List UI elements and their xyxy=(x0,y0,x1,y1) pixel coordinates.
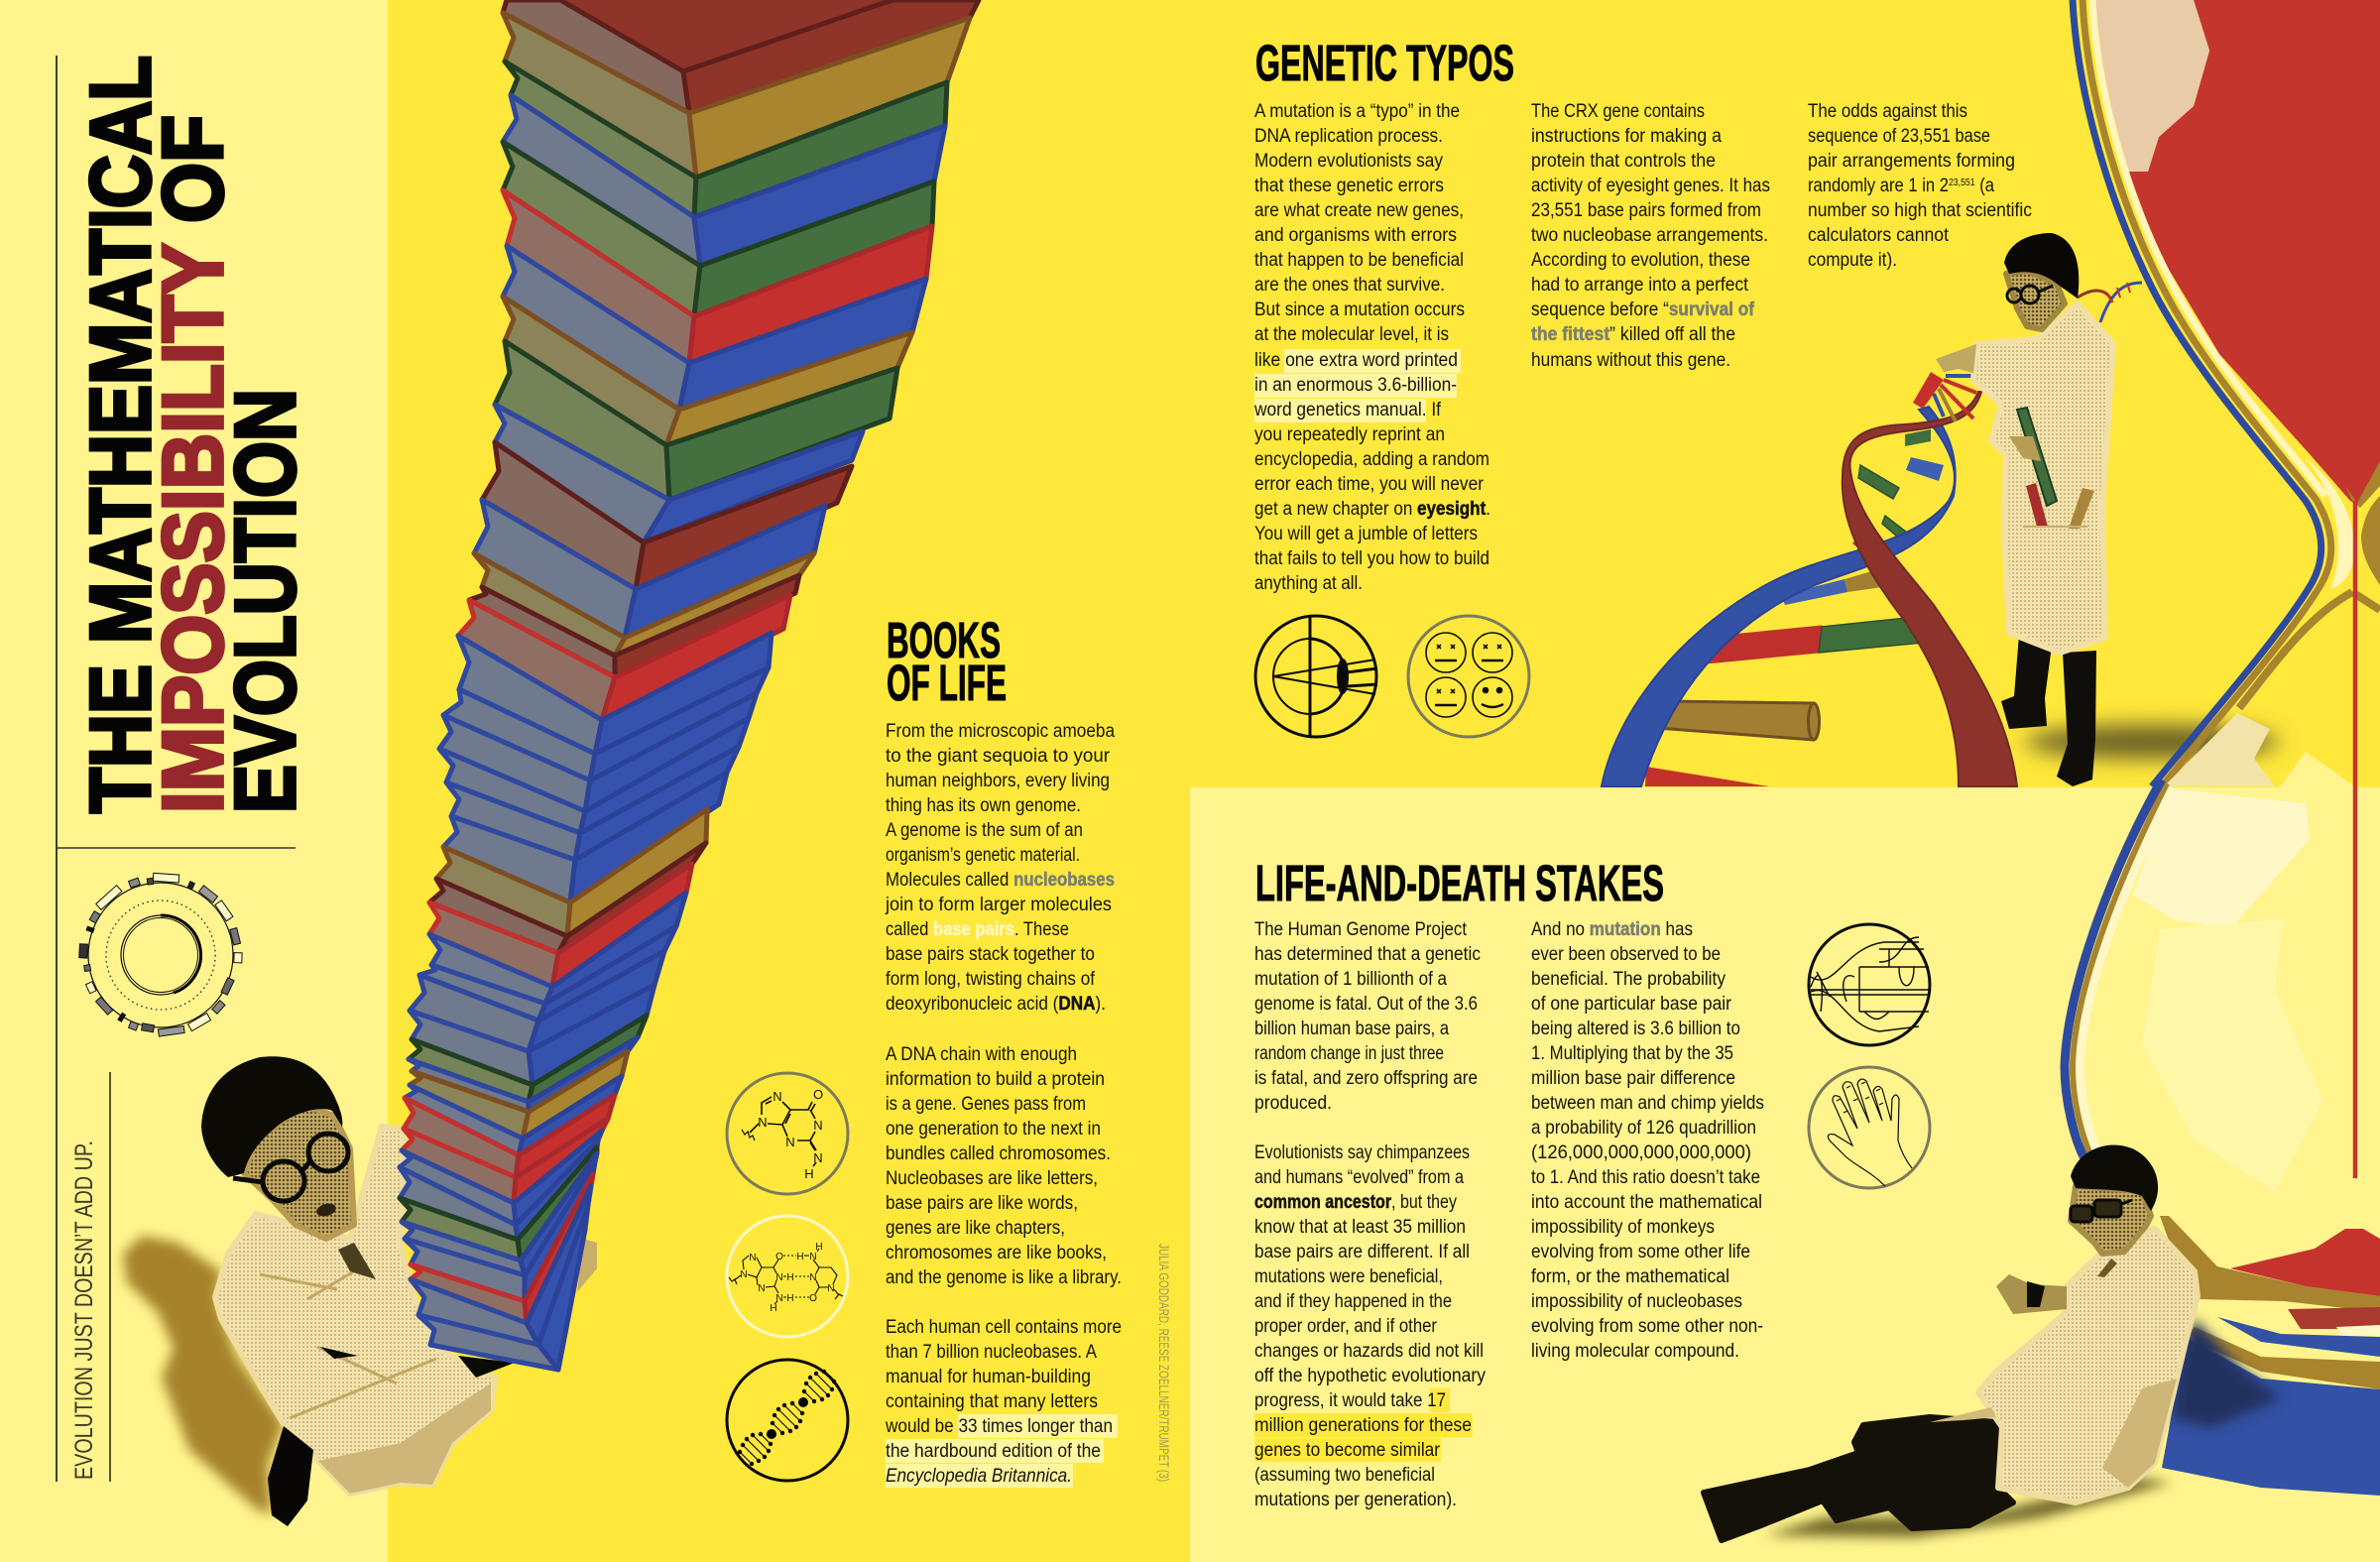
text block: life-and-death column 1: and humans “evolved” from a xyxy=(1254,1167,1464,1188)
book 42 xyxy=(418,1205,588,1370)
text block: genetic typos column 1 xyxy=(1253,101,1490,594)
icon: base pair molecule: N xyxy=(809,1272,817,1283)
pocket line xyxy=(2023,526,2087,528)
cream highlight xyxy=(2133,788,2310,929)
heading: life-and-death stakes: LIFE-AND-DEATH STAKES xyxy=(1255,855,1664,911)
text block: genetic typos column 1: Modern evolutionists say xyxy=(1254,151,1443,172)
pale block xyxy=(2280,752,2356,787)
text block: genetic typos column 1: But since a mutation occurs xyxy=(1254,300,1465,320)
text block: books of life: Encyclopedia Britannica. xyxy=(886,1466,1072,1487)
text block: life-and-death column 2: evolving from some other life xyxy=(1531,1242,1750,1262)
sleeve fold xyxy=(260,1269,436,1418)
book 26 xyxy=(419,926,676,1021)
book 7 xyxy=(503,246,926,410)
rung: green small 2 xyxy=(1882,516,1911,541)
book: top cover xyxy=(560,0,979,71)
text block: genetic typos column 3: (a xyxy=(1975,176,1994,196)
tube: green xyxy=(2017,408,2057,506)
text block: life-and-death column 2: to 1. And this ratio doesn’t take xyxy=(1531,1167,1760,1188)
text block: books of life: Molecules called nucleobases xyxy=(886,870,1115,891)
icon: base pair molecule xyxy=(727,1216,848,1337)
text block: life-and-death column 1: Evolutionists say chimpanzees xyxy=(1254,1142,1470,1163)
illustration: upper hourglass xyxy=(2025,0,2380,787)
book 12 xyxy=(474,500,825,638)
text block: genetic typos column 3: number so high that scientific xyxy=(1808,200,2032,221)
book 10 xyxy=(495,405,863,542)
text block: genetic typos column 2: sequence before “survival of xyxy=(1531,300,1755,320)
book 15 xyxy=(458,595,790,720)
illustration: large dna helix xyxy=(1602,283,2142,786)
text block: life-and-death column 1: base pairs are different. If all xyxy=(1254,1242,1470,1262)
tube: red xyxy=(2026,483,2048,527)
book 37 xyxy=(400,1147,597,1261)
panel: life-and-death stakes xyxy=(1190,787,2380,1562)
face 3 xyxy=(1426,677,1466,717)
text block: life-and-death column 1: mutations per generation). xyxy=(1254,1490,1457,1510)
text block: life-and-death column 1: (assuming two beneficial xyxy=(1254,1465,1435,1486)
book 9 xyxy=(495,341,897,500)
book 18 xyxy=(439,693,757,811)
text block: genetic typos column 3: The odds against this xyxy=(1808,101,1967,122)
text block: life-and-death column 1: common ancestor, but they xyxy=(1254,1192,1457,1213)
lab coat xyxy=(1973,303,2113,653)
rung: red left xyxy=(1706,627,1822,662)
coat xyxy=(1978,1229,2198,1502)
text block: books of life xyxy=(885,721,1122,1488)
text block: genetic typos column 1: like one extra word printed xyxy=(1254,350,1458,371)
book 31 xyxy=(410,1051,628,1139)
lab coat xyxy=(215,1127,495,1494)
rung: gold tube xyxy=(1657,701,1819,740)
shoe xyxy=(268,1426,313,1526)
figure: scientist with dna xyxy=(1936,233,2113,786)
hand xyxy=(1936,344,1976,373)
text block: books of life: containing that many letters xyxy=(886,1391,1098,1412)
icon: dna helix xyxy=(727,1360,848,1481)
text block: genetic typos column 1: DNA replication process. xyxy=(1254,126,1443,147)
coat shading xyxy=(318,1383,491,1494)
text block: books of life: base pairs are like words, xyxy=(886,1193,1078,1214)
heading line 2: OF LIFE xyxy=(887,655,1007,711)
icon: base pair molecule: N xyxy=(758,1283,766,1294)
text block: genetic typos column 1: are what create new genes, xyxy=(1254,200,1464,221)
book 13 xyxy=(474,553,814,656)
text block: books of life: genes are like chapters, xyxy=(886,1218,1065,1239)
book 19 xyxy=(439,718,749,833)
highlights xyxy=(1254,1388,1473,1462)
text block: life-and-death column 2: million base pair difference xyxy=(1531,1068,1735,1089)
text block: genetic typos column 3: calculators cannot xyxy=(1808,225,1950,246)
glasses xyxy=(2007,286,2053,303)
text block: life-and-death column 1: progress, it would take 17 xyxy=(1254,1390,1446,1411)
pale band in base xyxy=(2195,1303,2380,1364)
title line 3: EVOLUTION xyxy=(218,389,313,813)
floor shadow xyxy=(1765,1478,2172,1537)
book 4 xyxy=(503,95,945,266)
icon: base pair molecule: O xyxy=(775,1252,783,1262)
white stripe xyxy=(2336,1325,2380,1336)
book 41 xyxy=(411,1186,591,1345)
text block: genetic typos column 2: The CRX gene contains xyxy=(1531,101,1705,122)
text block: life-and-death column 2: (126,000,000,000,000,000) xyxy=(1531,1142,1751,1163)
text block: life-and-death column 2: 1. Multiplying that by the 35 xyxy=(1531,1043,1733,1064)
icon: guanine molecule: N xyxy=(758,1115,768,1130)
sleeve shadow xyxy=(320,1347,358,1359)
book 17 xyxy=(443,667,769,781)
text block: life-and-death column 1 xyxy=(1254,919,1486,1510)
text block: life-and-death column 2: being altered is 3.6 billion to xyxy=(1531,1019,1740,1039)
tie xyxy=(338,1243,376,1279)
gold crescent xyxy=(2160,1216,2380,1312)
text block: books of life: to the giant sequoia to your xyxy=(886,746,1111,767)
rung: gold upper xyxy=(1844,564,1903,592)
text block: books of life: the hardbound edition of the xyxy=(886,1441,1101,1462)
text block: books of life: form long, twisting chains of xyxy=(886,969,1096,990)
text block: life-and-death column 1: billion human base pairs, a xyxy=(1254,1019,1449,1039)
text block: genetic typos column 1: are the ones that survive. xyxy=(1254,275,1445,296)
text block: life-and-death column 2: of one particular base pair xyxy=(1531,994,1732,1015)
rung: green small xyxy=(1858,465,1899,499)
wristwatch xyxy=(2027,1281,2045,1307)
icon: base pair molecule: N xyxy=(775,1272,783,1283)
icon: faces xyxy=(1408,616,1529,737)
text block: life-and-death column 2: a probability of 126 quadrillion xyxy=(1531,1118,1756,1139)
text block: genetic typos column 3: randomly are 1 in 2 xyxy=(1808,176,1969,196)
text block: life-and-death column 1: produced. xyxy=(1254,1093,1332,1114)
book 25 xyxy=(429,893,686,1004)
icon: guanine molecule: N xyxy=(773,1089,782,1104)
tube: gold xyxy=(2069,488,2094,529)
rule: tagline xyxy=(109,1072,111,1482)
red sand xyxy=(2128,0,2380,506)
icon: guanine molecule: H xyxy=(804,1166,814,1181)
glass outline xyxy=(2073,0,2331,786)
text block: genetic typos column 1: and organisms with errors xyxy=(1254,225,1457,246)
panel: title sidebar xyxy=(0,0,388,1562)
rung: red small xyxy=(1852,529,1875,551)
hand on knee xyxy=(1930,1407,1996,1422)
text block: books of life: Nucleobases are like letters, xyxy=(886,1168,1098,1189)
text block: life-and-death column 1: million generations for these xyxy=(1254,1415,1472,1436)
book 39 xyxy=(405,1162,595,1301)
text block: life-and-death column 1: and if they happened in the xyxy=(1254,1291,1452,1312)
text block: books of life: and the genome is like a library. xyxy=(886,1267,1122,1288)
face xyxy=(2006,271,2065,329)
book 5 xyxy=(503,142,934,316)
text block: books of life: base pairs stack together to xyxy=(886,944,1095,965)
text block: life-and-death column 2: impossibility of monkeys xyxy=(1531,1217,1715,1238)
text block: genetic typos column 2: 23,551 base pairs formed from xyxy=(1531,200,1761,221)
book 11 xyxy=(482,442,852,589)
text block: books of life: manual for human-building xyxy=(886,1367,1091,1387)
text block: genetic typos column 1: You will get a jumble of letters xyxy=(1254,524,1478,544)
face 2 xyxy=(1473,633,1512,672)
icon: base pair molecule: H xyxy=(786,1293,794,1304)
text block: life-and-death column 1: proper order, and if other xyxy=(1254,1316,1438,1337)
cast shadow xyxy=(123,1236,284,1515)
hand right xyxy=(577,1239,597,1292)
gold lower curve xyxy=(2239,592,2380,708)
text block: books of life: human neighbors, every living xyxy=(886,771,1110,791)
text block: genetic typos column 3: pair arrangements forming xyxy=(1808,151,2015,172)
icon: base pair molecule: H xyxy=(796,1252,804,1262)
rule: under title xyxy=(57,847,296,849)
book 22 xyxy=(436,809,707,936)
book 3 xyxy=(505,61,947,217)
book 30 xyxy=(409,1037,638,1112)
text block: genetic typos column 3: compute it). xyxy=(1808,250,1897,271)
text block: life-and-death column 1: mutation of 1 billionth of a xyxy=(1254,969,1447,990)
face xyxy=(244,1105,354,1239)
highlights xyxy=(1254,349,1461,422)
text block: genetic typos column 2: activity of eyesight genes. It has xyxy=(1531,176,1770,196)
blue arc xyxy=(2217,1317,2380,1357)
face 4: smiling xyxy=(1473,677,1512,717)
text block: genetic typos column 2 xyxy=(1531,101,1770,371)
book 38 xyxy=(402,1153,597,1275)
rung: red lower xyxy=(1645,767,1769,786)
text block: life-and-death column 2: impossibility of nucleobases xyxy=(1531,1291,1742,1312)
blue base xyxy=(2162,1337,2380,1496)
text block: life-and-death column 2: And no mutation has xyxy=(1531,919,1693,940)
icon: circular genome map xyxy=(79,873,242,1036)
text block: life-and-death column 1: The Human Genome Project xyxy=(1254,919,1468,940)
rule: outer vertical xyxy=(56,56,58,1482)
book 33 xyxy=(404,1095,615,1177)
text block: life-and-death column 2: living molecular compound. xyxy=(1531,1341,1739,1362)
book 27 xyxy=(410,951,664,1051)
text block: genetic typos column 1: word genetics manual. If xyxy=(1253,400,1442,421)
text block: life-and-death column 1: know that at least 35 million xyxy=(1254,1217,1466,1238)
face xyxy=(2071,1186,2151,1254)
book 29 xyxy=(409,1016,647,1102)
icon: eye diagram xyxy=(1255,616,1377,737)
rung: light blue xyxy=(1781,579,1847,605)
rung on strand: green xyxy=(1905,429,1931,446)
text block: life-and-death column 2: ever been observed to be xyxy=(1531,944,1721,965)
title line 2: IMPOSSIBILITY OF xyxy=(146,115,241,813)
text block: life-and-death column 1: changes or hazards did not kill xyxy=(1254,1341,1484,1362)
text block: life-and-death column 2: into account the mathematical xyxy=(1531,1192,1762,1213)
icon: base pair molecule: N xyxy=(775,1293,783,1304)
text block: genetic typos column 1: A mutation is a “typo” in the xyxy=(1254,101,1460,122)
dark red stripe xyxy=(2288,1307,2380,1329)
heading: genetic typos: GENETIC TYPOS xyxy=(1255,35,1514,91)
hand on tube xyxy=(2009,436,2041,461)
icon: base pair molecule: N xyxy=(827,1283,835,1294)
book 24 xyxy=(429,864,692,987)
heading: books of life xyxy=(887,612,1007,711)
text block: books of life: Each human cell contains more xyxy=(886,1317,1122,1338)
text block: life-and-death column 2: form, or the mathematical xyxy=(1531,1266,1729,1287)
text block: life-and-death column 2 xyxy=(1531,919,1764,1362)
book 32 xyxy=(405,1076,622,1155)
cream highlight xyxy=(2090,0,2209,172)
text block: life-and-death column 1: has determined that a genetic xyxy=(1254,944,1481,965)
text block: genetic typos column 2: humans without this gene. xyxy=(1531,350,1730,371)
text block: genetic typos column 1: anything at all. xyxy=(1254,573,1363,594)
gold band xyxy=(2186,1327,2380,1389)
text block: books of life: than 7 billion nucleobases. A xyxy=(886,1342,1097,1363)
icon: guanine molecule: O xyxy=(813,1087,823,1102)
book 23 xyxy=(429,843,706,953)
book 6 xyxy=(503,190,932,363)
text block: genetic typos column 1: get a new chapter on eyesight. xyxy=(1254,499,1490,520)
rung: red top tube xyxy=(1913,372,1944,409)
text block: life-and-death column 1: genes to become similar xyxy=(1254,1440,1441,1461)
text block: genetic typos column 3 xyxy=(1808,101,2032,271)
rung: blue small xyxy=(1906,457,1944,481)
book 35 xyxy=(400,1131,602,1225)
icon: base pair molecule: H xyxy=(786,1272,794,1283)
text block: books of life: is a gene. Genes pass from xyxy=(886,1094,1086,1115)
small distant helix xyxy=(2078,283,2142,322)
text block: life-and-death column 1: random change in just three xyxy=(1254,1043,1444,1064)
back shadow on base xyxy=(2172,1319,2281,1428)
figure: scientist carrying books xyxy=(123,1056,597,1526)
text block: life-and-death column 2: between man and chimp yields xyxy=(1531,1093,1764,1114)
text block: genetic typos column 3: 23,551 xyxy=(1949,178,1975,188)
book 2 xyxy=(503,13,970,178)
highlights xyxy=(886,1414,1118,1488)
coat shading xyxy=(2102,1379,2177,1488)
text block: life-and-death column 1: off the hypothetic evolutionary xyxy=(1254,1366,1486,1386)
hair xyxy=(2004,233,2079,299)
glasses xyxy=(233,1134,348,1201)
icon: base pair molecule: H xyxy=(770,1303,777,1314)
face 1 xyxy=(1426,633,1466,672)
icon: base pair molecule: N xyxy=(809,1252,817,1262)
text block: genetic typos column 2: According to evolution, these xyxy=(1531,250,1750,271)
right leg xyxy=(2057,651,2096,786)
text block: genetic typos column 1: that happen to be beneficial xyxy=(1254,250,1464,271)
mouth xyxy=(315,1202,337,1218)
text block: genetic typos column 1: at the molecular level, it is xyxy=(1254,324,1449,345)
hand under stack xyxy=(458,1356,515,1378)
title xyxy=(73,56,313,813)
book 28 xyxy=(410,985,654,1085)
hair xyxy=(201,1056,342,1177)
gold collar xyxy=(2345,461,2380,508)
cream block xyxy=(2164,713,2275,786)
text block: genetic typos column 2: two nucleobase arrangements. xyxy=(1531,225,1768,246)
icon: anatomy diagram xyxy=(1809,924,1930,1045)
book 20 xyxy=(446,747,739,860)
pale glass reflection xyxy=(2142,919,2323,1191)
text block: books of life: A genome is the sum of an xyxy=(886,820,1083,841)
text block: genetic typos column 1: in an enormous 3.6-billion- xyxy=(1254,375,1457,396)
genome blocks xyxy=(79,873,242,1036)
text block: genetic typos column 1: encyclopedia, adding a random xyxy=(1254,449,1489,470)
text block: genetic typos column 2: the fittest” killed off all the xyxy=(1531,324,1735,345)
hair xyxy=(2071,1144,2158,1211)
icon: base pair molecule: O xyxy=(809,1293,817,1304)
red drip xyxy=(2353,501,2357,1178)
text block: life-and-death column 2: evolving from some other non- xyxy=(1531,1316,1763,1337)
text block: life-and-death column 2: beneficial. The probability xyxy=(1531,969,1726,990)
tagline: EVOLUTION JUST DOESN’T ADD UP. xyxy=(70,1141,98,1480)
text block: genetic typos column 1: error each time, you will never xyxy=(1254,474,1485,495)
pale band at neck xyxy=(2305,458,2354,589)
text block: books of life: one generation to the next in xyxy=(886,1119,1101,1140)
text block: genetic typos column 1: that these genetic errors xyxy=(1254,176,1444,196)
text block: genetic typos column 2: had to arrange into a perfect xyxy=(1531,275,1749,296)
glasses xyxy=(2071,1200,2132,1222)
text block: books of life: would be 33 times longer than xyxy=(885,1416,1113,1437)
tie xyxy=(2097,1259,2117,1277)
text block: books of life: information to build a protein xyxy=(886,1069,1105,1090)
blue strand xyxy=(1602,407,1956,786)
gold neck right xyxy=(2361,496,2380,585)
book 36 xyxy=(400,1141,598,1240)
rung: green right xyxy=(1819,616,1934,653)
book 21 xyxy=(443,773,727,902)
book 40 xyxy=(411,1174,593,1323)
text block: life-and-death column 1: is fatal, and zero offspring are xyxy=(1254,1068,1478,1089)
text block: life-and-death column 1: mutations were beneficial, xyxy=(1254,1266,1443,1287)
text block: genetic typos column 1: you repeatedly reprint an xyxy=(1254,424,1445,445)
top rungs fan xyxy=(1934,376,1979,421)
text block: books of life: From the microscopic amoeba xyxy=(886,721,1115,742)
heading line 1: BOOKS xyxy=(887,612,1001,668)
figure: scientist checking watch xyxy=(1704,1144,2281,1540)
icon: base pair molecule: H xyxy=(815,1242,823,1253)
icon: guanine molecule: N xyxy=(813,1118,823,1133)
text block: genetic typos column 1: that fails to tell you how to build xyxy=(1254,548,1489,569)
book 14 xyxy=(469,575,799,677)
forearm and hand xyxy=(1996,1274,2067,1314)
book stack xyxy=(400,0,979,1370)
red-brown strand xyxy=(1843,392,2017,786)
icon: base pair molecule: N xyxy=(740,1269,748,1280)
text block: life-and-death column 1: genome is fatal. Out of the 3.6 xyxy=(1254,994,1478,1015)
text block: genetic typos column 3: sequence of 23,551 base xyxy=(1808,126,1990,147)
text block: books of life: organism’s genetic material. xyxy=(886,845,1080,866)
left leg xyxy=(2001,635,2052,729)
icon: guanine molecule xyxy=(727,1073,848,1194)
shadow at feet xyxy=(2025,725,2279,759)
icon: guanine molecule: N xyxy=(785,1135,795,1149)
book 16 xyxy=(458,633,772,754)
trousers and boot xyxy=(1704,1417,2013,1540)
text block: books of life: join to form larger molecules xyxy=(885,895,1112,915)
text block: books of life: called base pairs. These xyxy=(886,919,1069,940)
icon: human hand xyxy=(1809,1067,1930,1188)
icon: guanine molecule: N xyxy=(813,1150,823,1165)
book 8 xyxy=(503,297,912,445)
book 34 xyxy=(402,1119,608,1203)
text block: books of life: A DNA chain with enough xyxy=(886,1044,1077,1065)
illustration: lower hourglass xyxy=(2065,501,2380,1496)
text block: books of life: bundles called chromosomes. xyxy=(886,1143,1111,1164)
icon: base pair molecule: N xyxy=(749,1253,757,1263)
red sand pile xyxy=(2230,1229,2380,1296)
book 1 xyxy=(503,0,979,113)
text block: genetic typos column 2: instructions for making a xyxy=(1531,126,1722,147)
glass outline xyxy=(2065,780,2175,1158)
text block: books of life: chromosomes are like books, xyxy=(886,1243,1107,1263)
text block: books of life: deoxyribonucleic acid (DNA). xyxy=(886,994,1106,1015)
text block: books of life: thing has its own genome. xyxy=(886,795,1081,816)
text block: genetic typos column 2: protein that controls the xyxy=(1531,151,1716,172)
